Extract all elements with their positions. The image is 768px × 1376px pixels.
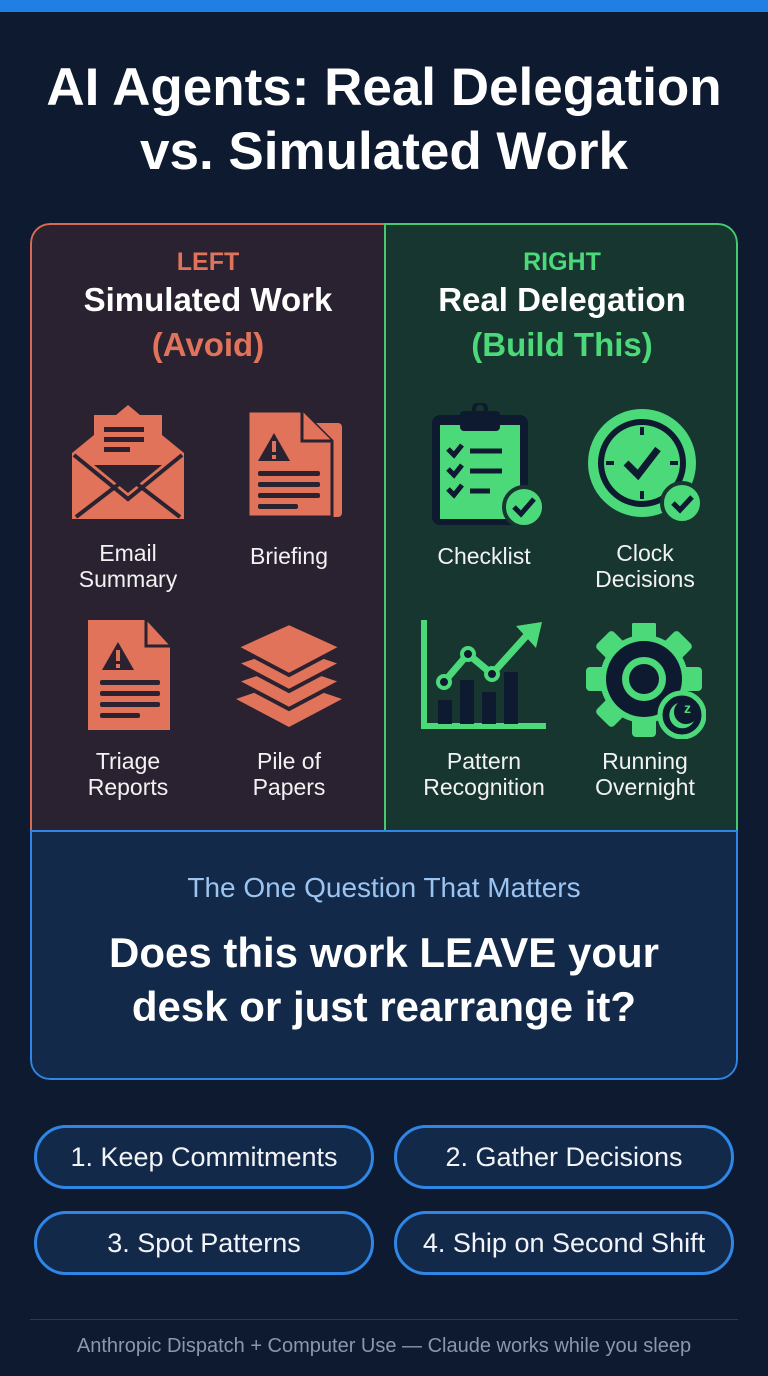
pill: 3 bbox=[34, 1211, 374, 1275]
pill: 4: 4. Ship on Second Shift bbox=[423, 1228, 705, 1258]
icon: checklist bbox=[432, 403, 542, 525]
left heading: Simulated Work bbox=[84, 281, 332, 318]
comparison panel bbox=[30, 223, 738, 1080]
icon: gear overnight: z bbox=[684, 700, 691, 716]
label: pattern recognition: Recognition bbox=[423, 774, 545, 800]
label: briefing: Briefing bbox=[250, 543, 328, 569]
label: running overnight: Running bbox=[602, 748, 688, 774]
label: triage reports: Reports bbox=[88, 774, 168, 800]
icon: triage report bbox=[88, 620, 170, 730]
label: clock decisions bbox=[595, 540, 695, 592]
label: pattern recognition: Pattern bbox=[447, 748, 521, 774]
icon: clock bbox=[588, 409, 700, 521]
title: AI Agents: Real Delegation bbox=[46, 58, 722, 117]
label: checklist: Checklist bbox=[437, 543, 531, 569]
question text: desk or just rearrange it? bbox=[132, 983, 636, 1030]
left heading: LEFT bbox=[177, 248, 239, 276]
right heading bbox=[438, 248, 686, 363]
footer: Anthropic Dispatch + Computer Use — Claude works while you sleep bbox=[77, 1335, 691, 1357]
label: email summary: Email bbox=[99, 540, 157, 566]
label: pile of papers: Pile of bbox=[257, 748, 321, 774]
label: triage reports: Triage bbox=[96, 748, 160, 774]
label: clock decisions: Clock bbox=[616, 540, 674, 566]
icon: envelope bbox=[72, 405, 184, 519]
subheading: The One Question That Matters bbox=[187, 872, 581, 903]
right heading: RIGHT bbox=[523, 248, 601, 276]
label: running overnight bbox=[595, 748, 695, 800]
label: pattern recognition bbox=[423, 748, 545, 800]
right heading: (Build This) bbox=[471, 326, 653, 363]
pill: 3: 3. Spot Patterns bbox=[107, 1228, 301, 1258]
pill: 1: 1. Keep Commitments bbox=[70, 1142, 338, 1172]
left heading bbox=[84, 248, 332, 363]
left heading: (Avoid) bbox=[152, 326, 264, 363]
top bar bbox=[0, 0, 768, 12]
pill: 4 bbox=[394, 1211, 734, 1275]
pill: 2 bbox=[394, 1125, 734, 1189]
panel: key question bbox=[30, 830, 738, 1080]
label: pile of papers bbox=[253, 748, 325, 800]
label: email summary: Summary bbox=[79, 566, 177, 592]
right heading: Real Delegation bbox=[438, 281, 686, 318]
icon: briefing doc bbox=[250, 412, 342, 517]
label: email summary bbox=[79, 540, 178, 592]
label: clock decisions: Decisions bbox=[595, 566, 695, 592]
question text bbox=[109, 929, 659, 1030]
panel: right real delegation bbox=[384, 223, 738, 830]
label: running overnight: Overnight bbox=[595, 774, 695, 800]
label: pile of papers: Papers bbox=[253, 774, 325, 800]
panel: left simulated work bbox=[30, 223, 384, 830]
pill: 2: 2. Gather Decisions bbox=[445, 1142, 683, 1172]
question text: Does this work LEAVE your bbox=[109, 929, 659, 976]
icon: pile of papers bbox=[236, 625, 342, 727]
icon: pattern chart bbox=[421, 620, 546, 729]
icon: gear overnight bbox=[586, 623, 706, 739]
pill: 1 bbox=[34, 1125, 374, 1189]
title bbox=[46, 58, 722, 181]
label: triage reports bbox=[88, 748, 168, 800]
title: vs. Simulated Work bbox=[140, 122, 628, 181]
